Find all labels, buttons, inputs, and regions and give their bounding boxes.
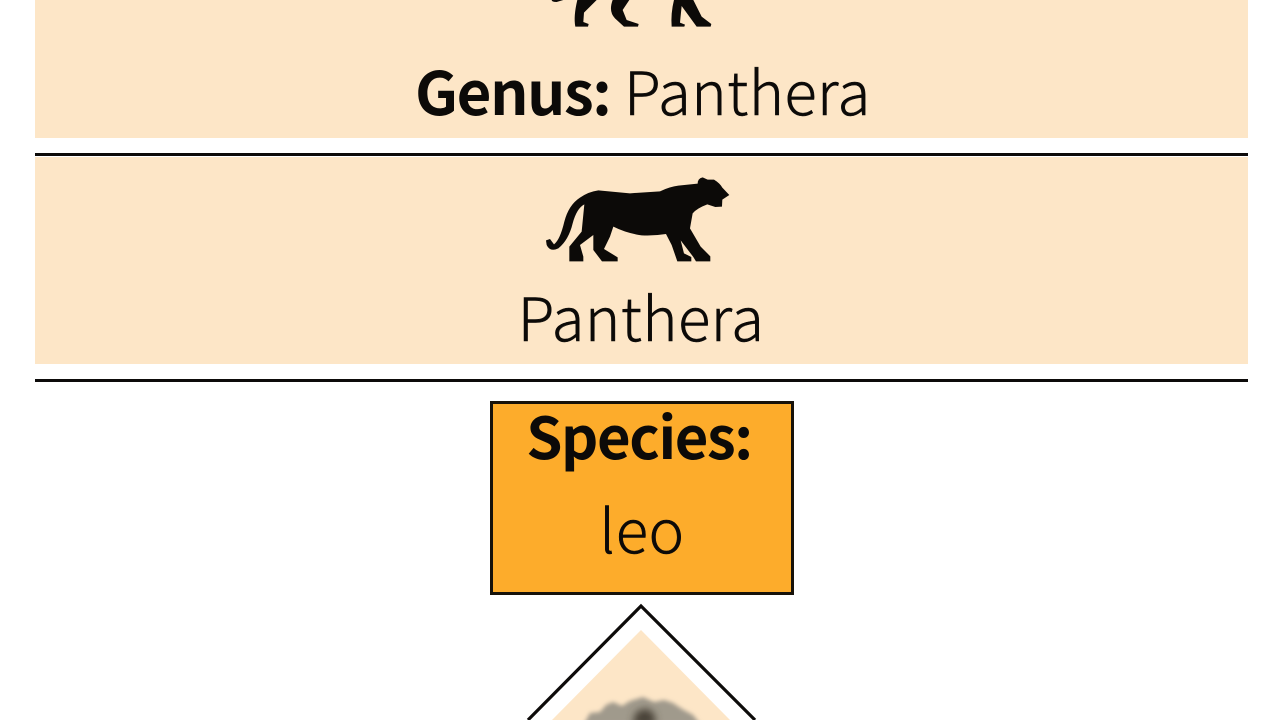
label: leo: leo	[599, 484, 685, 571]
lion mane	[584, 697, 700, 720]
panel: genus heading band	[35, 0, 1248, 138]
divider line under Panthera band	[35, 379, 1248, 382]
divider line under genus band	[35, 153, 1248, 156]
heading: Species:: Species:	[526, 392, 752, 476]
triangle: lion portrait frame	[526, 604, 756, 720]
heading: Genus: Panthera: Genus: Panthera	[415, 46, 871, 133]
label: Panthera: Panthera	[518, 272, 764, 359]
panel: species box	[490, 401, 794, 595]
icon: lion silhouette legs at top	[552, 0, 712, 27]
panel: Panthera band	[35, 157, 1248, 364]
